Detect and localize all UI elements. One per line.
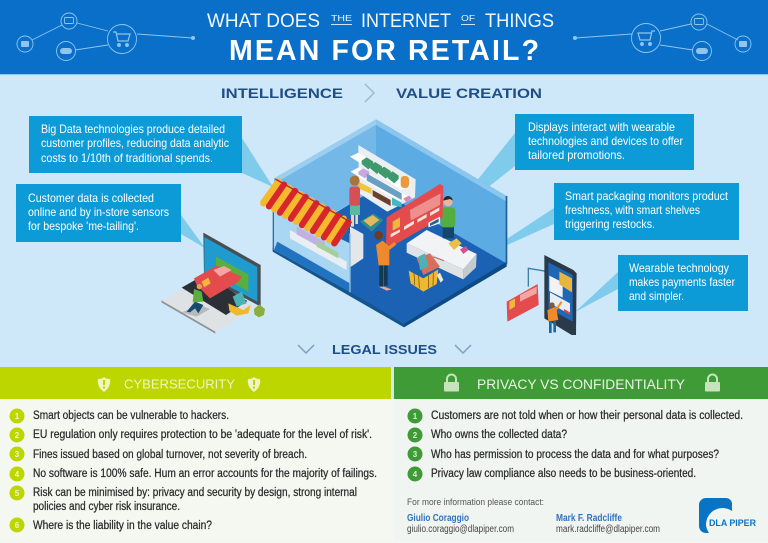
privacy list: 2 bbox=[413, 431, 418, 440]
shopping basket bbox=[409, 253, 444, 292]
cybersecurity header bbox=[0, 367, 391, 399]
logo: DLA Piper bbox=[699, 498, 756, 533]
privacy list: 3 bbox=[413, 450, 418, 459]
cybersecurity list: 4 bbox=[15, 470, 20, 479]
callout: big data: customer profiles, reducing data analytic bbox=[41, 136, 229, 150]
contact details: giulio.coraggio@dlapiper.com bbox=[407, 524, 514, 535]
cybersecurity list: 1 bbox=[15, 412, 20, 421]
title: INTERNET bbox=[361, 10, 451, 32]
privacy list: 4 bbox=[413, 470, 418, 479]
callout beams bbox=[181, 133, 618, 312]
callout: smart packaging: triggering restocks. bbox=[565, 217, 655, 231]
privacy list: Privacy law compliance also needs to be business-oriented. bbox=[431, 468, 696, 480]
person: cashier bbox=[441, 196, 455, 238]
contact details: Giulio Coraggio bbox=[407, 513, 469, 524]
cybersecurity list: 6 bbox=[15, 521, 20, 530]
small basket bbox=[360, 213, 383, 232]
callout: big data: costs to 1/10th of traditional spends. bbox=[41, 151, 213, 165]
callout: displays bbox=[515, 114, 694, 170]
title: OF bbox=[461, 13, 475, 23]
title bbox=[207, 10, 554, 67]
panel backing bbox=[0, 399, 768, 543]
callout: wearable technology: Wearable technology bbox=[629, 261, 729, 275]
heading: intelligence to value creation: INTELLIGENCE bbox=[221, 85, 343, 101]
callout: big data: Big Data technologies produce detailed bbox=[41, 122, 225, 136]
card display bbox=[386, 184, 443, 247]
cybersecurity list: EU regulation only requires protection to be 'adequate for the level of risk'. bbox=[33, 429, 372, 441]
privacy list: Customers are not told when or how their personal data is collected. bbox=[431, 410, 743, 422]
privacy list: Who has permission to process the data and for what purposes? bbox=[431, 449, 719, 461]
shelves bbox=[350, 145, 416, 212]
title: THINGS bbox=[485, 10, 554, 32]
illustration: laptop bbox=[161, 233, 265, 334]
callout: wearable technology bbox=[618, 255, 748, 311]
title: THE bbox=[331, 13, 352, 23]
illustration: phone and card bbox=[507, 255, 577, 335]
panel: privacy vs confidentiality bbox=[394, 367, 768, 541]
callout: customer data: Customer data is collected bbox=[28, 191, 154, 205]
person: customer bbox=[374, 231, 395, 291]
privacy list bbox=[408, 408, 743, 482]
callout: customer data: online and by in-store sensors bbox=[28, 205, 169, 219]
callout: wearable technology: makes payments faster bbox=[629, 275, 735, 289]
illustration: isometric store bbox=[260, 119, 507, 327]
heading: legal issues bbox=[298, 342, 471, 357]
cybersecurity list: 3 bbox=[15, 450, 20, 459]
cybersecurity list: Smart objects can be vulnerable to hackers. bbox=[33, 410, 229, 422]
callout: customer data: for bespoke 'me-tailing'. bbox=[28, 219, 139, 233]
privacy header bbox=[394, 367, 768, 399]
cybersecurity list: Fines issued based on global turnover, not severity of breach. bbox=[33, 449, 307, 461]
callout: displays: Displays interact with wearable bbox=[528, 120, 675, 134]
callout: displays: technologies and devices to offer bbox=[528, 134, 683, 148]
cybersecurity header: CYBERSECURITY bbox=[124, 378, 236, 392]
heading: intelligence to value creation: VALUE CREATION bbox=[396, 85, 542, 101]
callout: displays: tailored promotions. bbox=[528, 148, 625, 162]
contact details bbox=[407, 497, 660, 535]
callout: big data bbox=[29, 116, 242, 173]
contact details: mark.radcliffe@dlapiper.com bbox=[556, 524, 660, 535]
cybersecurity list: policies and cyber risk insurance. bbox=[33, 501, 180, 513]
privacy header: PRIVACY VS CONFIDENTIALITY bbox=[477, 377, 685, 392]
icon network: left bbox=[17, 13, 195, 60]
cybersecurity list bbox=[10, 408, 377, 532]
icon network: right bbox=[573, 14, 751, 60]
privacy list: 1 bbox=[413, 412, 418, 421]
awning bbox=[260, 179, 352, 245]
callout: smart packaging: Smart packaging monitors product bbox=[565, 189, 729, 203]
callout: smart packaging: freshness, with smart shelves bbox=[565, 203, 700, 217]
cybersecurity list: 2 bbox=[15, 431, 20, 440]
window glass bbox=[274, 207, 350, 292]
callout: wearable technology: and simpler. bbox=[629, 289, 684, 303]
callout: smart packaging bbox=[554, 183, 739, 240]
heading: intelligence to value creation bbox=[221, 84, 542, 102]
counter bbox=[407, 230, 477, 279]
contact details: For more information please contact: bbox=[407, 497, 544, 508]
panel: cybersecurity bbox=[0, 367, 391, 541]
cybersecurity list: No software is 100% safe. Hum an error accounts for the majority of failings. bbox=[33, 468, 377, 480]
cybersecurity list: 5 bbox=[15, 489, 20, 498]
cybersecurity list: Where is the liability in the value chain? bbox=[33, 520, 212, 532]
privacy list: Who owns the collected data? bbox=[431, 429, 567, 441]
contact details: Mark F. Radcliffe bbox=[556, 513, 622, 524]
heading: legal issues: LEGAL ISSUES bbox=[332, 342, 437, 357]
title: WHAT DOES bbox=[207, 10, 320, 32]
callout: customer data bbox=[16, 184, 181, 242]
cybersecurity list: Risk can be minimised by: privacy and security by design, strong internal bbox=[33, 487, 357, 499]
header banner bbox=[0, 0, 768, 75]
person: woman bbox=[349, 176, 360, 227]
logo: DLA Piper: DLA PIPER bbox=[709, 518, 756, 529]
title: MEAN FOR RETAIL? bbox=[229, 35, 539, 67]
